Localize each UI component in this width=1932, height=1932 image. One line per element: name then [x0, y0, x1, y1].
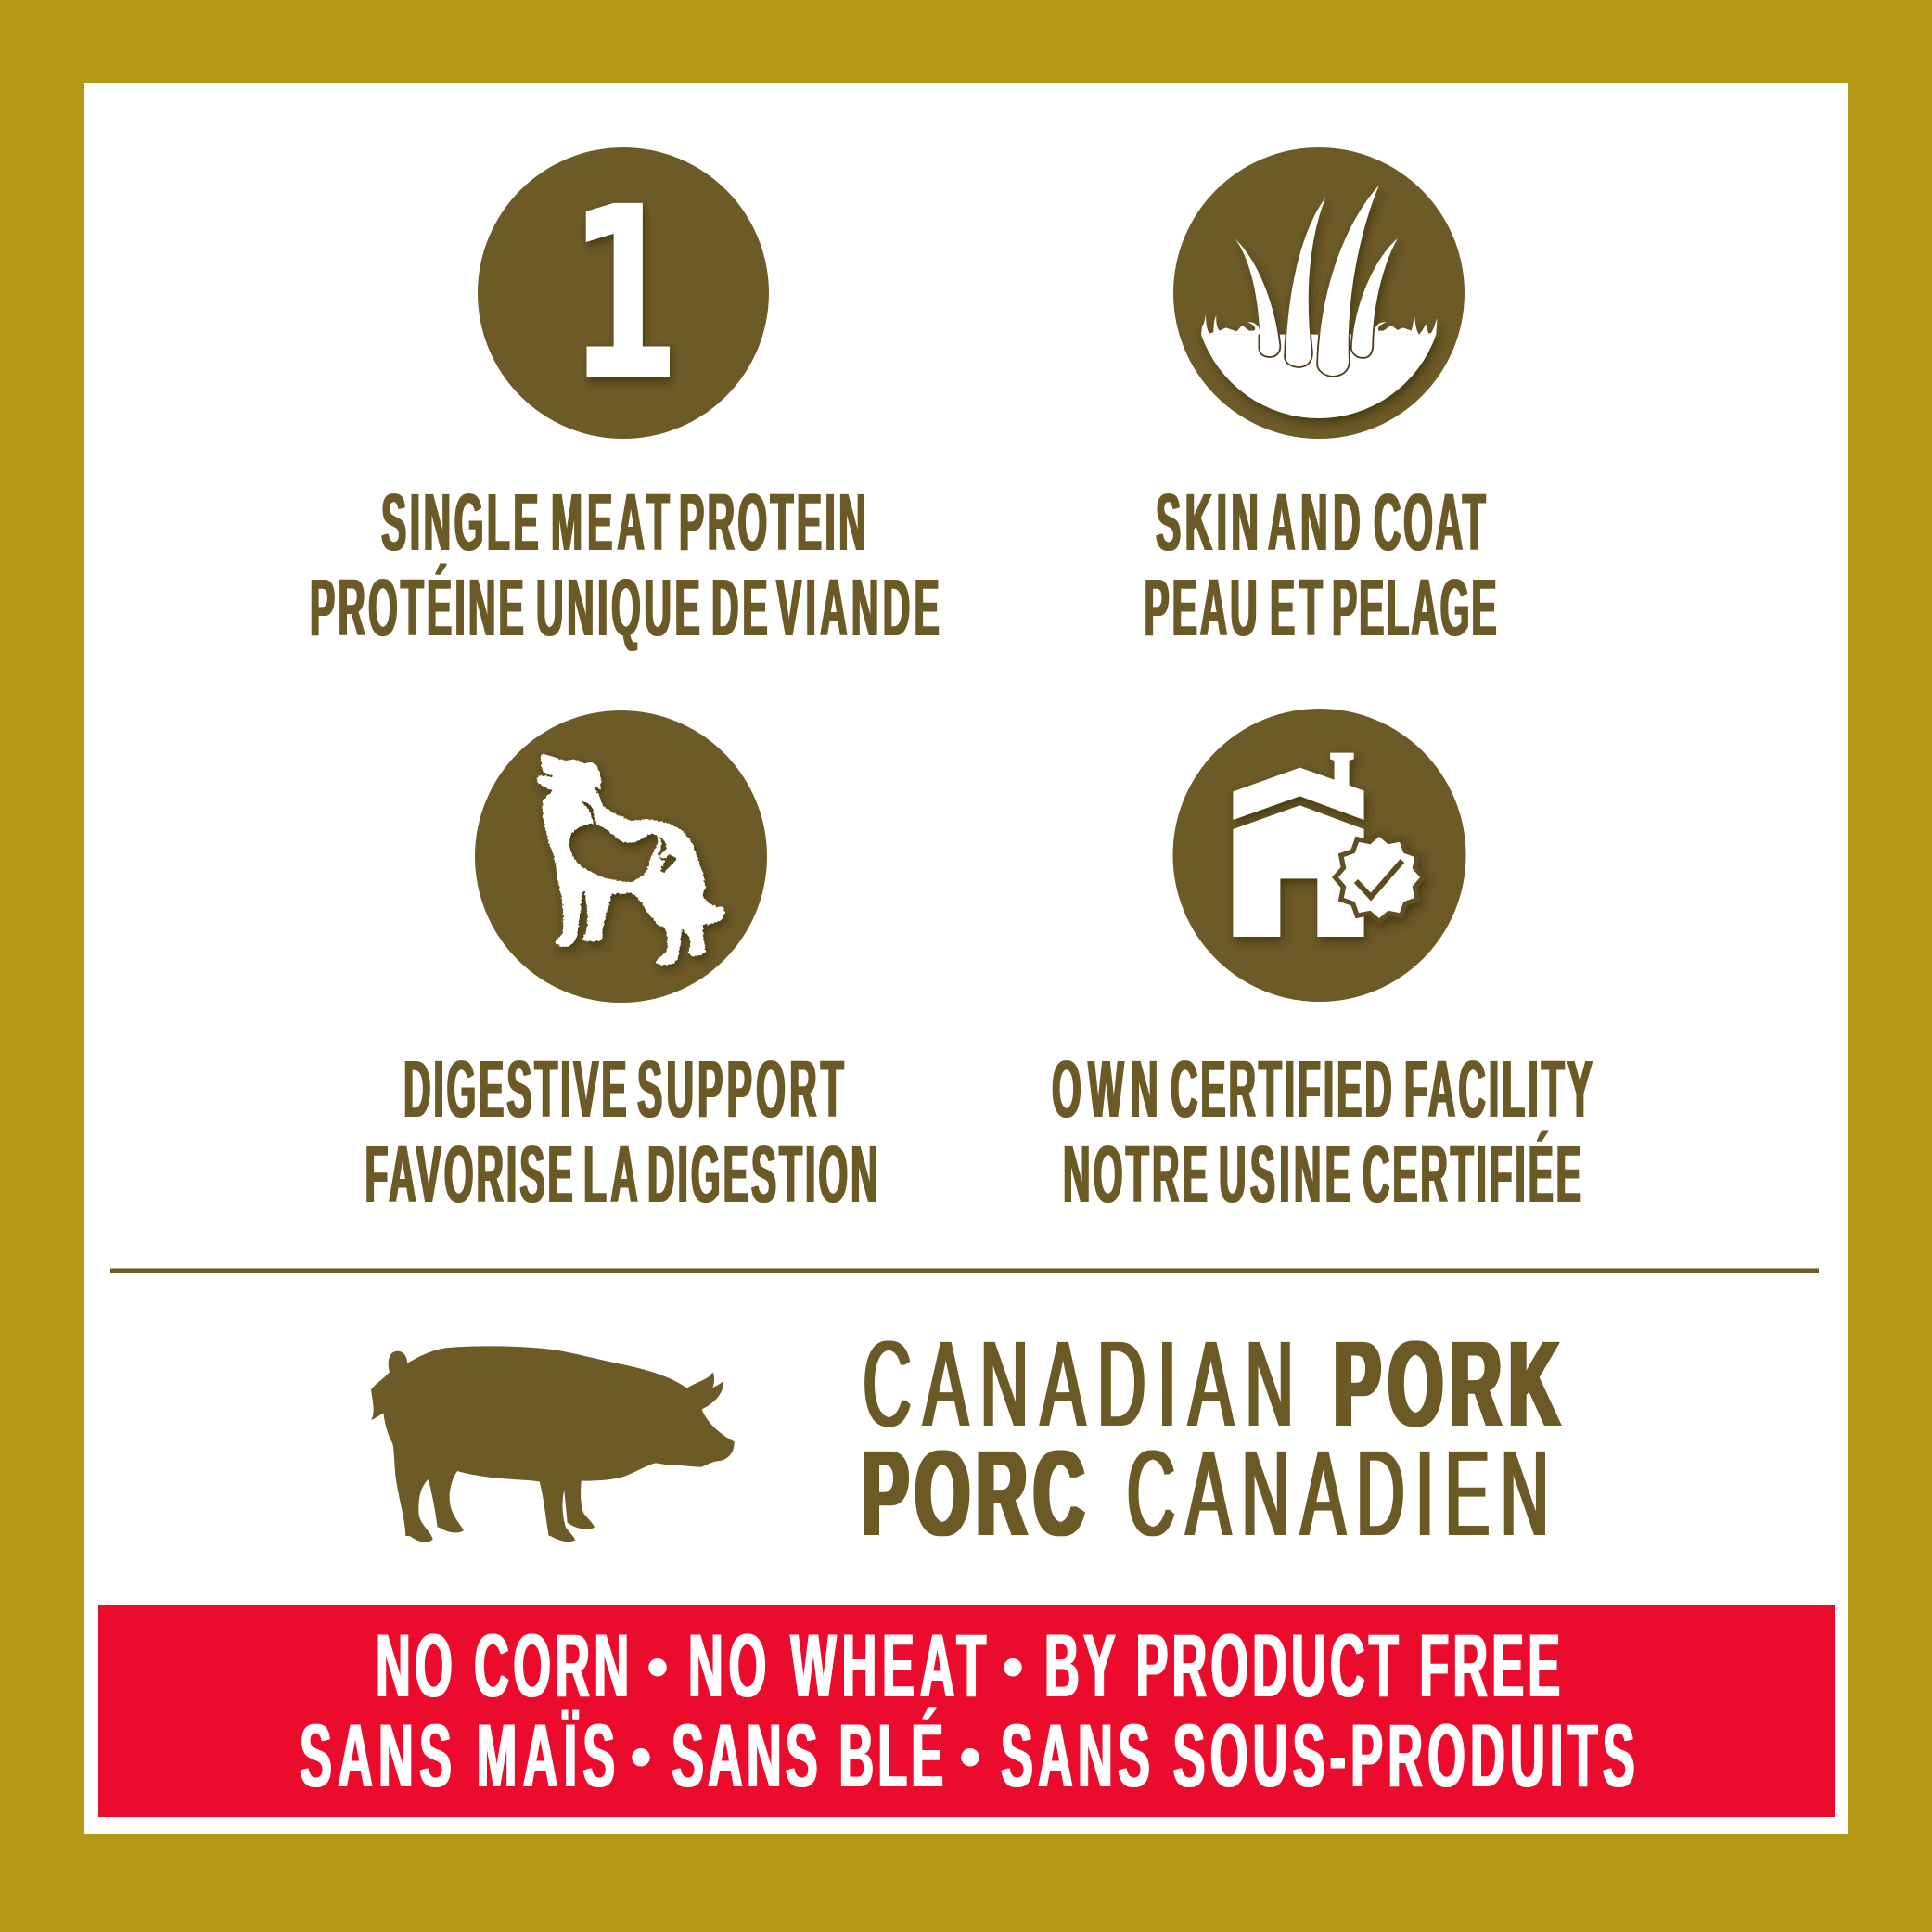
label: single meat protein: DE: [711, 563, 768, 653]
label: digestive support: [365, 1044, 878, 1220]
label: single meat protein: SINGLE: [381, 478, 539, 568]
heading: canadian pork: CANADIAN: [863, 1316, 1294, 1452]
banner: no corn no wheat: SANS SOUS-PRODUITS: [1001, 1705, 1635, 1806]
icon: skin and coat hair follicles: [1173, 147, 1465, 439]
label: skin and coat: AND: [1268, 478, 1361, 568]
label: skin and coat: ET: [1270, 563, 1323, 653]
label: own certified facility: CERTIFIÉE: [1363, 1130, 1581, 1220]
label: digestive support: DIGESTIVE: [403, 1044, 627, 1134]
label: skin and coat: COAT: [1374, 478, 1486, 568]
label: single meat protein: [310, 478, 940, 653]
label: own certified facility: [1052, 1044, 1593, 1220]
label: single meat protein: MEAT: [551, 478, 670, 568]
label: skin and coat: SKIN: [1156, 478, 1259, 568]
banner: no corn no wheat: •: [1002, 1631, 1024, 1702]
banner: no corn no wheat: NO CORN: [376, 1615, 629, 1716]
banner: no corn no wheat: •: [959, 1721, 981, 1792]
label: digestive support: DIGESTION: [647, 1130, 878, 1220]
label: single meat protein: VIANDE: [776, 563, 940, 653]
icon: single protein number one: [478, 147, 769, 439]
heading: canadian pork: PORK: [1334, 1315, 1560, 1452]
label: own certified facility: NOTRE: [1063, 1130, 1208, 1220]
label: own certified facility: USINE: [1219, 1130, 1350, 1220]
label: skin and coat: PELAGE: [1332, 563, 1497, 653]
label: own certified facility: OWN: [1052, 1044, 1158, 1134]
banner: no corn no wheat: [98, 1605, 1835, 1817]
icon: single protein number one: 1: [568, 156, 681, 435]
heading: canadian pork: PORC: [862, 1425, 1084, 1561]
label: digestive support: FAVORISE: [365, 1130, 573, 1220]
icon: digestive support dog: [475, 710, 767, 1003]
label: single meat protein: PROTÉINE: [310, 563, 524, 653]
banner: no corn no wheat: NO WHEAT: [688, 1615, 986, 1716]
banner: no corn no wheat: BY PRODUCT FREE: [1044, 1615, 1560, 1716]
banner: no corn no wheat: SANS MAÏS: [300, 1705, 615, 1806]
banner: no corn no wheat: •: [630, 1721, 652, 1792]
label: skin and coat: [1145, 478, 1497, 653]
banner: no corn no wheat: SANS BLÉ: [672, 1705, 943, 1806]
heading: canadian pork: CANADIEN: [1127, 1426, 1549, 1562]
icon: pig silhouette: [371, 1346, 735, 1542]
label: digestive support: SUPPORT: [637, 1044, 844, 1134]
divider line: [110, 1269, 1819, 1273]
label: single meat protein: PROTEIN: [679, 478, 866, 568]
banner: no corn no wheat: •: [646, 1631, 669, 1702]
label: single meat protein: UNIQUE: [536, 563, 700, 653]
heading: canadian pork: [862, 1315, 1560, 1562]
label: digestive support: LA: [583, 1130, 638, 1220]
label: skin and coat: PEAU: [1145, 563, 1258, 653]
label: own certified facility: FACILITY: [1404, 1044, 1593, 1134]
icon: certified facility house: [1172, 709, 1465, 1002]
label: own certified facility: CERTIFIED: [1171, 1044, 1392, 1134]
